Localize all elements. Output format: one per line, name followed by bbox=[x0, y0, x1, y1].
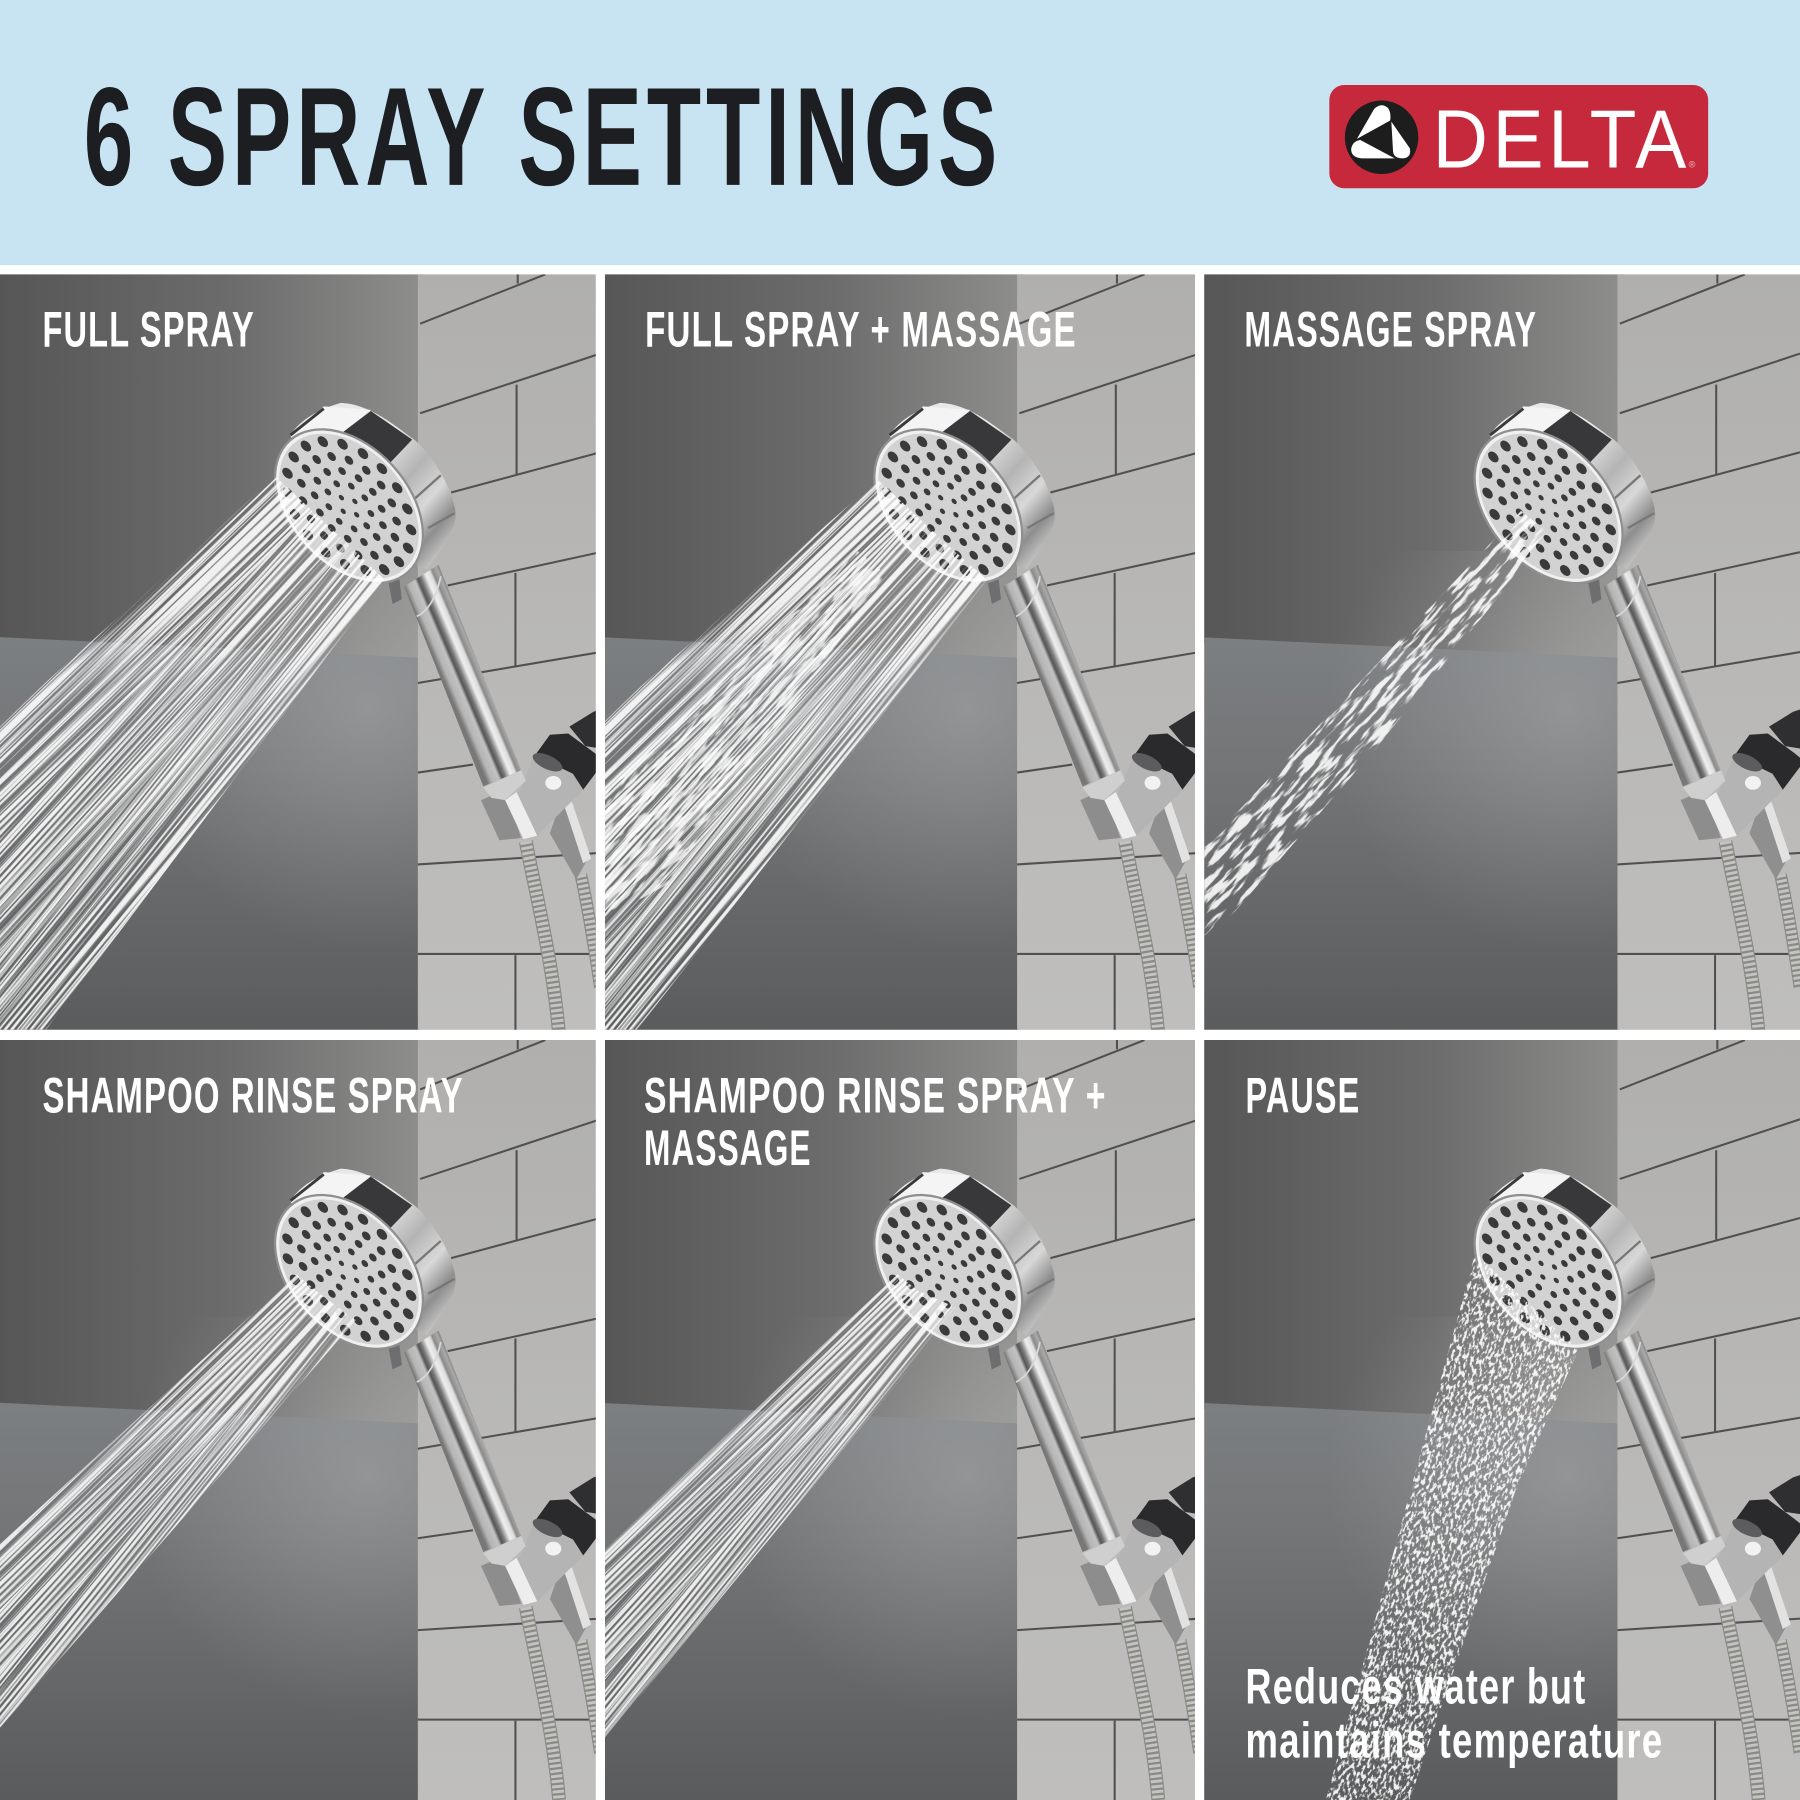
panel: full spray + massage bbox=[599, 270, 1200, 1034]
title: 6 SPRAY SETTINGS bbox=[84, 58, 1002, 215]
panel: pause bbox=[1200, 1035, 1800, 1800]
logo: Delta: ® bbox=[1689, 160, 1696, 170]
label: full spray: FULL SPRAY bbox=[42, 302, 255, 358]
header band bbox=[0, 0, 1800, 265]
label: massage spray: MASSAGE SPRAY bbox=[1244, 302, 1537, 358]
panel: massage spray bbox=[1200, 270, 1800, 1034]
logo: Delta bbox=[1329, 85, 1708, 188]
label: shampoo rinse spray: SHAMPOO RINSE SPRAY bbox=[42, 1067, 464, 1123]
logo: Delta: DELTA bbox=[1433, 93, 1691, 186]
panel: full spray bbox=[0, 270, 600, 1034]
text: reduces water: Reduces water but bbox=[1246, 1659, 1586, 1715]
label: massage line: MASSAGE bbox=[644, 1120, 812, 1176]
panel: shampoo rinse spray bbox=[0, 1035, 600, 1800]
label: pause: PAUSE bbox=[1246, 1067, 1360, 1123]
label: shampoo rinse spray + massage: SHAMPOO RINSE SPRAY + bbox=[644, 1067, 1107, 1123]
panel: shampoo rinse spray + massage bbox=[599, 1035, 1200, 1800]
label: full spray + massage: FULL SPRAY + MASSAGE bbox=[645, 302, 1077, 358]
